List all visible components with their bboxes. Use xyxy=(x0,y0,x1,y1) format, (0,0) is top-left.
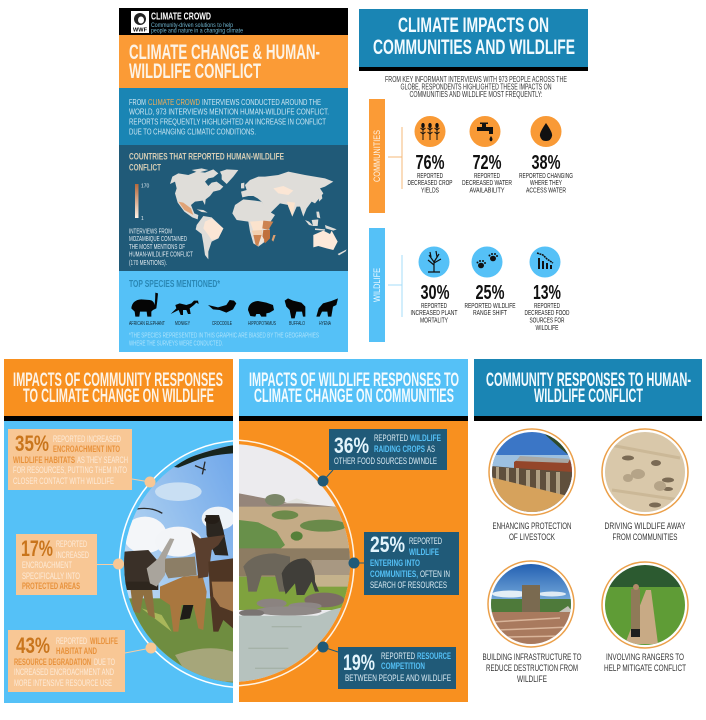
callout: 35 percent: AS THEY SEARCH xyxy=(77,455,128,465)
labels: species names: HYENA xyxy=(319,321,331,327)
text block: introduction xyxy=(385,75,567,99)
stat: 72 percent: REPORTED xyxy=(474,171,500,180)
heading: panel title: WILDLIFE CONFLICT xyxy=(129,60,261,83)
callout: 19 percent: 19% xyxy=(343,650,375,675)
photo: elephants and hippos by river xyxy=(239,440,355,686)
callout: 35 percent: WILDLIFE HABITATS xyxy=(13,455,75,465)
heading: wildlife responses impacts: IMPACTS OF WILDLIFE RESPONSES TO xyxy=(249,369,459,391)
stat: 38 percent: REPORTED CHANGING xyxy=(519,171,573,180)
panel: impacts of community responses on wildlife xyxy=(4,359,233,703)
label: building infrastructure: REDUCE DESTRUCTION FROM xyxy=(486,663,578,673)
heading: countries reported: COUNTRIES THAT REPORTED HUMAN-WILDLIFE xyxy=(129,151,284,161)
callout: 36 percent xyxy=(318,429,447,486)
text block: introduction: FROM KEY INFORMANT INTERVIEWS WITH 973 PEOPLE ACROSS THE xyxy=(385,75,567,84)
callout: 17 percent: REPORTED xyxy=(56,539,87,549)
heading: top species mentioned: TOP SPECIES MENTIONED* xyxy=(129,278,221,290)
callout: 36 percent: REPORTED xyxy=(374,433,408,443)
callout: 35 percent: REPORTED INCREASED xyxy=(53,434,121,444)
stat: 38 percent: WHERE THEY xyxy=(530,178,562,187)
callout: 36 percent: AS xyxy=(427,444,435,454)
stat: 13 percent: SOURCES FOR xyxy=(530,316,565,325)
header: Climate Crowd brand bar: CLIMATE CROWD xyxy=(151,12,211,22)
label: enhancing protection: ENHANCING PROTECTION xyxy=(492,521,572,531)
stat: 30 percent: INCREASED PLANT xyxy=(410,308,458,317)
text block: interview summary: DUE TO CHANGING CLIMATIC CONDITIONS. xyxy=(129,126,256,136)
header: Climate Crowd brand bar: WWF xyxy=(133,28,147,34)
stat: 76 percent xyxy=(408,152,452,194)
callout: 43 percent: RESOURCE DEGRADATION xyxy=(14,657,91,667)
header: Climate Crowd brand bar xyxy=(119,8,348,35)
label: involving rangers xyxy=(604,652,686,673)
icons: species silhouettes xyxy=(131,293,338,318)
stat: 30 percent: 30% xyxy=(420,282,450,304)
photo: animal tracks in sand xyxy=(602,429,688,515)
callout: 17 percent: ENCROACHMENT xyxy=(22,560,72,570)
callout: 43 percent: REPORTED xyxy=(56,636,87,646)
labels: species names: HIPPOPOTAMUS xyxy=(248,321,276,327)
photo: donkeys and herder xyxy=(118,440,233,688)
text block: interview summary: WORLD, 973 INTERVIEWS MENTION HUMAN-WILDLIFE CONFLICT. xyxy=(129,107,329,117)
icon: bare tree xyxy=(418,246,450,278)
heading: community responses xyxy=(474,359,702,421)
legend: color scale: 1 xyxy=(141,216,144,222)
callout: 36 percent: OTHER FOOD SOURCES DWINDLE xyxy=(334,456,437,466)
text block: Mozambique note: INTERVIEWS FROM xyxy=(129,226,172,235)
photo: infrastructure water tank xyxy=(488,561,574,647)
label: building infrastructure: BUILDING INFRASTRUCTURE TO xyxy=(482,652,582,662)
callout: 17 percent: 17% xyxy=(21,536,53,561)
labels: species names: AFRICAN ELEPHANT xyxy=(129,321,165,327)
text block: interview summary: INTERVIEWS CONDUCTED AROUND THE xyxy=(202,97,321,107)
stat: 38 percent xyxy=(519,152,573,194)
heading: climate impacts: CLIMATE IMPACTS ON xyxy=(398,13,549,37)
stat: 13 percent: 13% xyxy=(533,282,561,304)
icon: wheat xyxy=(414,116,446,147)
callout: 19 percent: COMPETITION xyxy=(381,661,425,671)
heading: climate impacts: COMMUNITIES AND WILDLIFE xyxy=(373,35,575,59)
text block: interview summary xyxy=(119,88,348,145)
icon: paw prints xyxy=(472,246,502,278)
callout: 35 percent: CLOSER CONTACT WITH WILDLIFE xyxy=(13,476,114,486)
stat: 76 percent: YIELDS xyxy=(421,186,439,194)
stat: 76 percent: 76% xyxy=(416,152,445,174)
callout: 43 percent: DUE TO xyxy=(94,657,115,667)
panel: climate impacts on communities and wildlife xyxy=(359,9,588,342)
stat: 13 percent: WILDLIFE xyxy=(536,323,558,332)
callout: 25 percent: WILDLIFE xyxy=(409,547,439,557)
label: enhancing protection xyxy=(492,521,572,542)
stat: 38 percent: ACCESS WATER xyxy=(526,186,566,194)
label: communities bar: COMMUNITIES xyxy=(372,130,383,182)
callout: 36 percent: WILDLIFE xyxy=(410,433,441,443)
text block: interview summary: CLIMATE CROWD xyxy=(148,97,200,107)
heading: community responses impacts: IMPACTS OF COMMUNITY RESPONSES xyxy=(13,369,223,391)
text block: species footnote: *THE SPECIES REPRESENTED IN THIS GRAPHIC ARE BIASED BY THE GEOGRAPHIES xyxy=(129,333,319,340)
stat: 30 percent xyxy=(410,282,458,325)
callout: 25 percent: 25% xyxy=(370,532,405,557)
stat: 25 percent: REPORTED WILDLIFE xyxy=(464,301,516,310)
text block: introduction: COMMUNITIES AND WILDLIFE MOST FREQUENTLY: xyxy=(410,90,542,99)
text block: introduction: GLOBE, RESPONDENTS HIGHLIGHTED THESE IMPACTS ON xyxy=(400,82,552,92)
stat: 13 percent: REPORTED xyxy=(534,301,560,310)
text block: Mozambique note: MOZAMBIQUE CONTAINED xyxy=(129,234,187,243)
callout: 17 percent xyxy=(16,534,124,595)
stat: 72 percent: DECREASED WATER xyxy=(462,178,512,187)
callout: 43 percent xyxy=(8,630,156,692)
legend: color scale: 170 xyxy=(141,184,150,190)
callout: 35 percent xyxy=(8,429,156,490)
callout: 43 percent: HABITAT AND xyxy=(56,646,97,656)
stat: 38 percent: 38% xyxy=(532,152,561,174)
photo: ranger on boardwalk xyxy=(602,562,688,648)
labels: species names: MONKEY xyxy=(175,321,190,327)
labels: species names: BUFFALO xyxy=(289,321,305,327)
photo: livestock enclosure xyxy=(489,429,575,515)
stat: 76 percent: REPORTED xyxy=(417,171,443,180)
chart: world choropleth map xyxy=(170,168,347,259)
callout: 17 percent: PROTECTED AREAS xyxy=(22,581,80,591)
header: Climate Crowd brand bar: Community-driven solutions to help xyxy=(151,23,234,29)
heading: panel title xyxy=(119,35,348,88)
icon: water drop xyxy=(530,116,562,147)
icon: water tap xyxy=(470,116,500,147)
legend: color scale xyxy=(135,184,150,222)
callout: 25 percent: REPORTED xyxy=(409,536,442,546)
text block: Mozambique note: THE MOST MENTIONS OF xyxy=(129,242,185,251)
label: building infrastructure: WILDLIFE xyxy=(517,674,547,684)
label: communities bar xyxy=(369,99,385,213)
label: wildlife bar xyxy=(369,228,385,342)
header: Climate Crowd brand bar: people and nature in a changing climate xyxy=(151,28,244,34)
callout: 25 percent: SEARCH OF RESOURCES xyxy=(370,580,447,590)
callout: 17 percent: SPECIFICALLY INTO xyxy=(22,571,80,581)
label: enhancing protection: OF LIVESTOCK xyxy=(509,532,555,542)
text block: interview summary: FROM xyxy=(129,97,146,107)
callout: 36 percent: 36% xyxy=(334,433,369,458)
callout: 43 percent: MORE INTENSIVE RESOURCE USE xyxy=(14,678,112,688)
callout: 25 percent: COMMUNITIES, xyxy=(370,569,418,579)
stat: 25 percent: RANGE SHIFT xyxy=(473,308,507,317)
labels: species names xyxy=(129,321,331,327)
label: driving wildlife away xyxy=(604,521,686,542)
callout: 19 percent xyxy=(318,642,456,689)
callout: 17 percent: INCREASED xyxy=(56,550,89,560)
callout: 19 percent: RESOURCE xyxy=(417,651,451,661)
text block: species footnote: WHERE THE SURVEYS WERE CONDUCTED. xyxy=(129,341,223,348)
stat: 13 percent xyxy=(524,282,570,332)
text block: interview summary: REPORTS FREQUENTLY HIGHLIGHTED AN INCREASE IN CONFLICT xyxy=(129,117,326,127)
stat: 30 percent: MORTALITY xyxy=(420,316,448,325)
stat: 72 percent: 72% xyxy=(472,152,502,174)
label: wildlife bar: WILDLIFE xyxy=(372,268,383,302)
heading: wildlife responses impacts xyxy=(239,359,468,421)
stat: 25 percent xyxy=(464,282,516,317)
callout: 25 percent: OFTEN IN xyxy=(420,569,450,579)
callout: 36 percent: RAIDING CROPS xyxy=(374,444,425,454)
icon: falling food chart xyxy=(530,246,560,278)
labels: species names: CROCODILE xyxy=(212,321,232,327)
label: driving wildlife away: FROM COMMUNITIES xyxy=(612,532,678,542)
callout: 43 percent: INCREASED ENCROACHMENT AND xyxy=(14,667,114,677)
panel: impacts of wildlife responses on communities xyxy=(239,359,468,702)
text block: Mozambique note xyxy=(129,226,193,267)
callout: 35 percent: ENCROACHMENT INTO xyxy=(53,444,120,454)
stat: 25 percent: 25% xyxy=(476,282,505,304)
stat: 76 percent: DECREASED CROP xyxy=(408,178,452,187)
stat: 13 percent: DECREASED FOOD xyxy=(524,308,570,317)
callout: 25 percent xyxy=(348,532,459,595)
stat: 30 percent: REPORTED xyxy=(421,301,447,310)
callout: 43 percent: WILDLIFE xyxy=(90,636,118,646)
label: building infrastructure xyxy=(482,652,582,684)
callout: 43 percent: 43% xyxy=(16,633,50,658)
heading: community responses impacts xyxy=(4,359,233,421)
panel: community responses to human-wildlife conflict xyxy=(474,359,702,684)
text block: Mozambique note: HUMAN-WILDLIFE CONFLICT xyxy=(129,250,193,259)
heading: panel title: CLIMATE CHANGE & HUMAN- xyxy=(129,41,320,64)
callout: 19 percent: REPORTED xyxy=(381,651,415,661)
heading: wildlife responses impacts: CLIMATE CHANGE ON COMMUNITIES xyxy=(254,385,454,407)
stat: 72 percent: AVAILABILITY xyxy=(470,186,504,194)
text block: Mozambique note: (170 MENTIONS). xyxy=(129,258,167,267)
panel: climate change and human-wildlife conflict xyxy=(119,8,348,352)
callout: 25 percent: ENTERING INTO xyxy=(370,558,420,568)
callout: 35 percent: FOR RESOURCES, PUTTING THEM INTO xyxy=(13,465,127,475)
heading: climate impacts xyxy=(359,9,588,71)
heading: community responses impacts: TO CLIMATE CHANGE ON WILDLIFE xyxy=(23,385,214,407)
stat: 72 percent xyxy=(462,152,512,194)
panel: top species xyxy=(119,271,348,352)
heading: countries reported xyxy=(129,151,284,173)
callout: 19 percent: BETWEEN PEOPLE AND WILDLIFE xyxy=(345,673,451,683)
text block: species footnote xyxy=(129,333,319,348)
panel: countries map section xyxy=(119,145,348,271)
callout: 35 percent: 35% xyxy=(15,431,49,456)
heading: countries reported: CONFLICT xyxy=(129,163,161,173)
